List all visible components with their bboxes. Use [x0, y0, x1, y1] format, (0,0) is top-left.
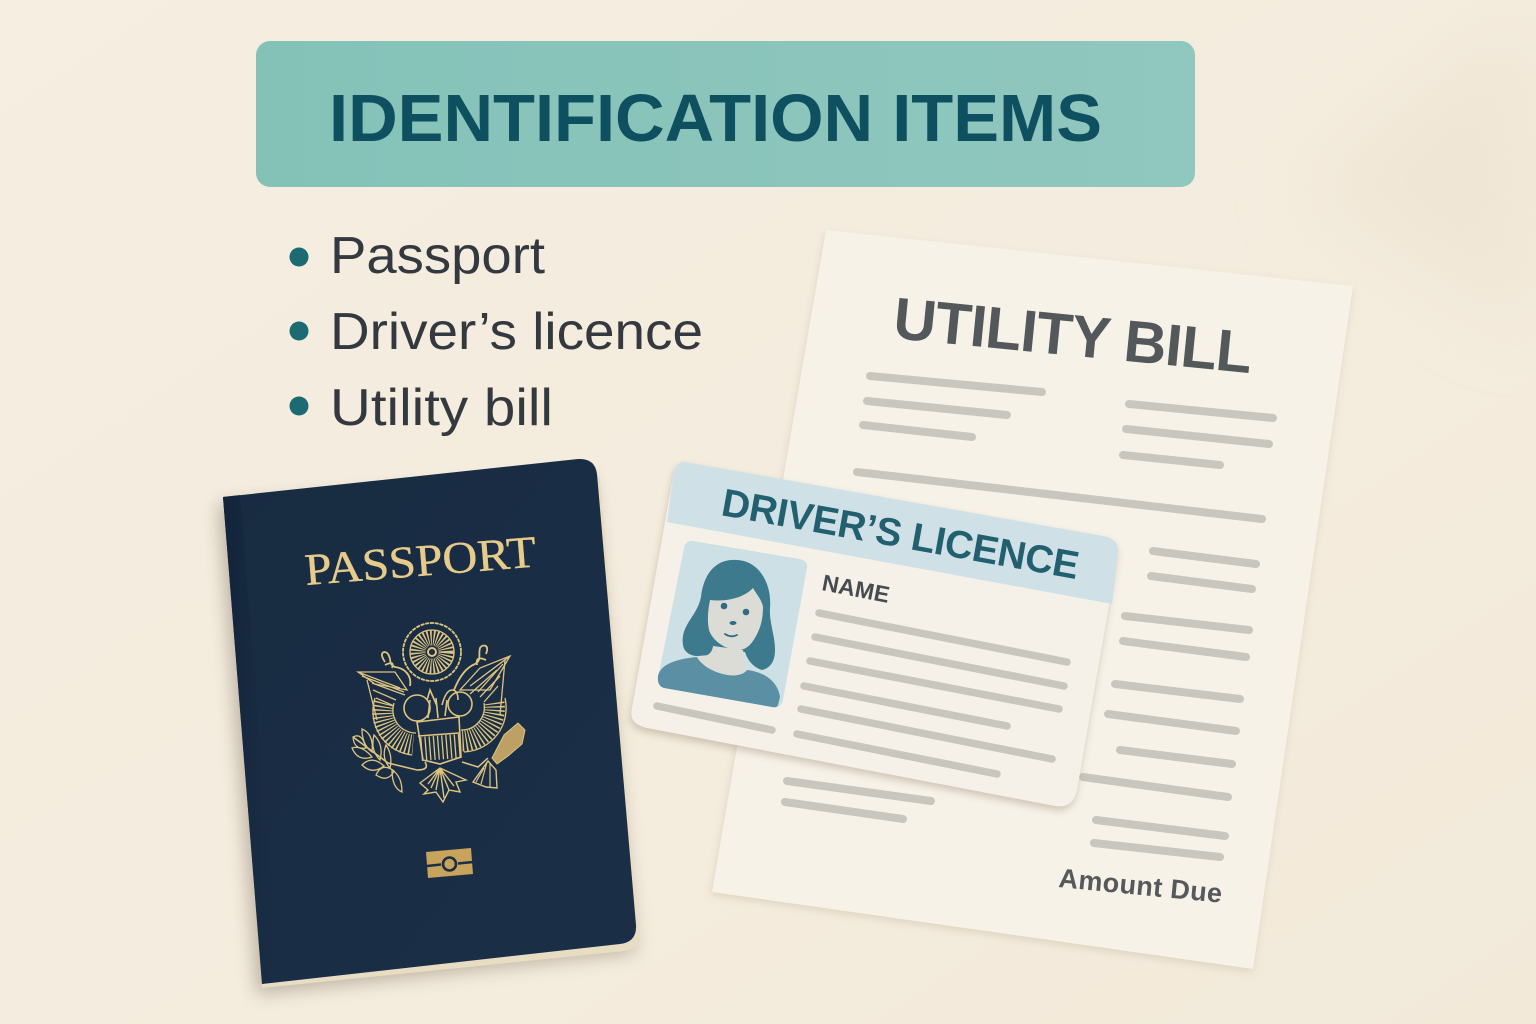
driver's licence card [630, 462, 1118, 810]
bill text lines [785, 376, 1273, 857]
title text: IDENTIFICATION ITEMS [329, 81, 1102, 156]
emblem shield [417, 717, 461, 764]
card text lines [657, 613, 1067, 774]
bullet: driver's licence: Driver’s licence [330, 303, 703, 361]
emblem tail feathers [420, 768, 466, 802]
passport cover [223, 459, 636, 984]
card header band [667, 462, 1118, 604]
gold emblem [352, 623, 525, 802]
emblem olive branch [352, 729, 426, 792]
portrait neck [697, 646, 747, 675]
emblem left wing [358, 672, 430, 755]
name label: NAME [820, 569, 892, 608]
bill heading: UTILITY BILL [891, 285, 1255, 386]
passport [218, 459, 639, 994]
emblem scrolls [382, 652, 410, 686]
portrait hair [683, 560, 775, 670]
emblem halo [403, 623, 461, 681]
bullet: utility bill: Utility bill [330, 379, 553, 437]
title banner [256, 41, 1195, 187]
portrait face [708, 588, 763, 650]
bullet: passport: Passport [330, 227, 546, 285]
portrait shoulders [658, 657, 780, 707]
passport heading: PASSPORT [303, 527, 538, 595]
passport page edge [250, 470, 639, 988]
emblem arrows [462, 723, 525, 788]
emblem right wing [448, 656, 510, 752]
emblem head [427, 690, 458, 718]
bullet list [290, 227, 703, 437]
card heading: DRIVER’S LICENCE [718, 482, 1082, 588]
card photo [658, 541, 807, 707]
utility bill document [711, 230, 1353, 972]
amount due label: Amount Due [1057, 863, 1224, 909]
passport chip symbol [426, 848, 473, 878]
portrait features [721, 603, 749, 636]
